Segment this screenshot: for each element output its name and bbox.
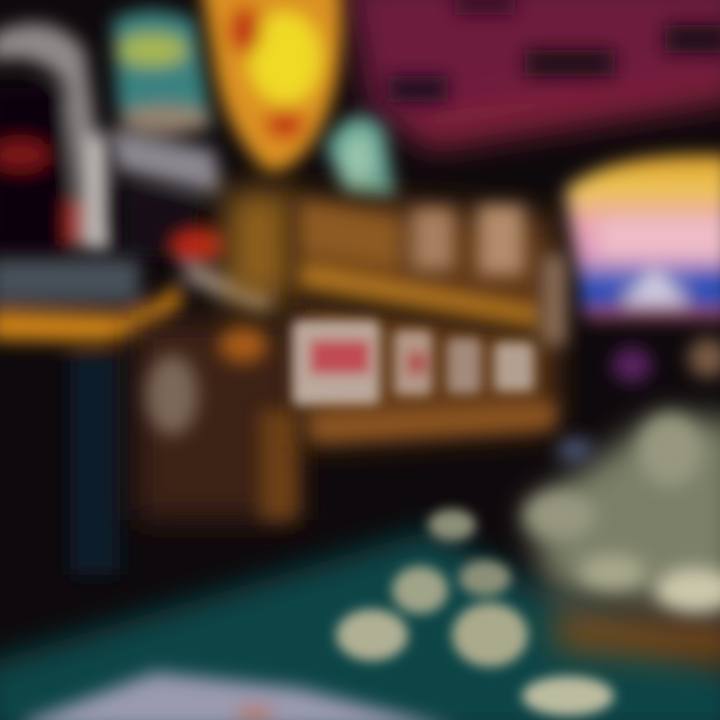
small teal sign — [325, 116, 395, 200]
panel: wood pillar — [135, 190, 300, 520]
foreground chips — [336, 509, 614, 716]
slot machine screens — [292, 320, 534, 406]
ceiling dark vents — [388, 0, 720, 102]
paper card on table — [25, 672, 460, 720]
panel: left arch — [0, 23, 112, 253]
dark monitor — [542, 255, 720, 383]
pillar details — [146, 327, 298, 520]
panel: chip stacks — [525, 415, 720, 665]
slot machine base — [308, 402, 555, 442]
panel: ceiling — [345, 0, 720, 150]
panel: bright screen — [565, 154, 720, 320]
chip highlights — [524, 414, 720, 612]
upper slot machine lights — [300, 200, 540, 338]
panel: teal floor — [0, 530, 720, 720]
yellow balloon sign — [200, 0, 342, 172]
teal and yellow sign — [108, 10, 222, 260]
panel: slot machine row — [295, 195, 555, 445]
panel: counter and left shelf — [0, 227, 272, 575]
